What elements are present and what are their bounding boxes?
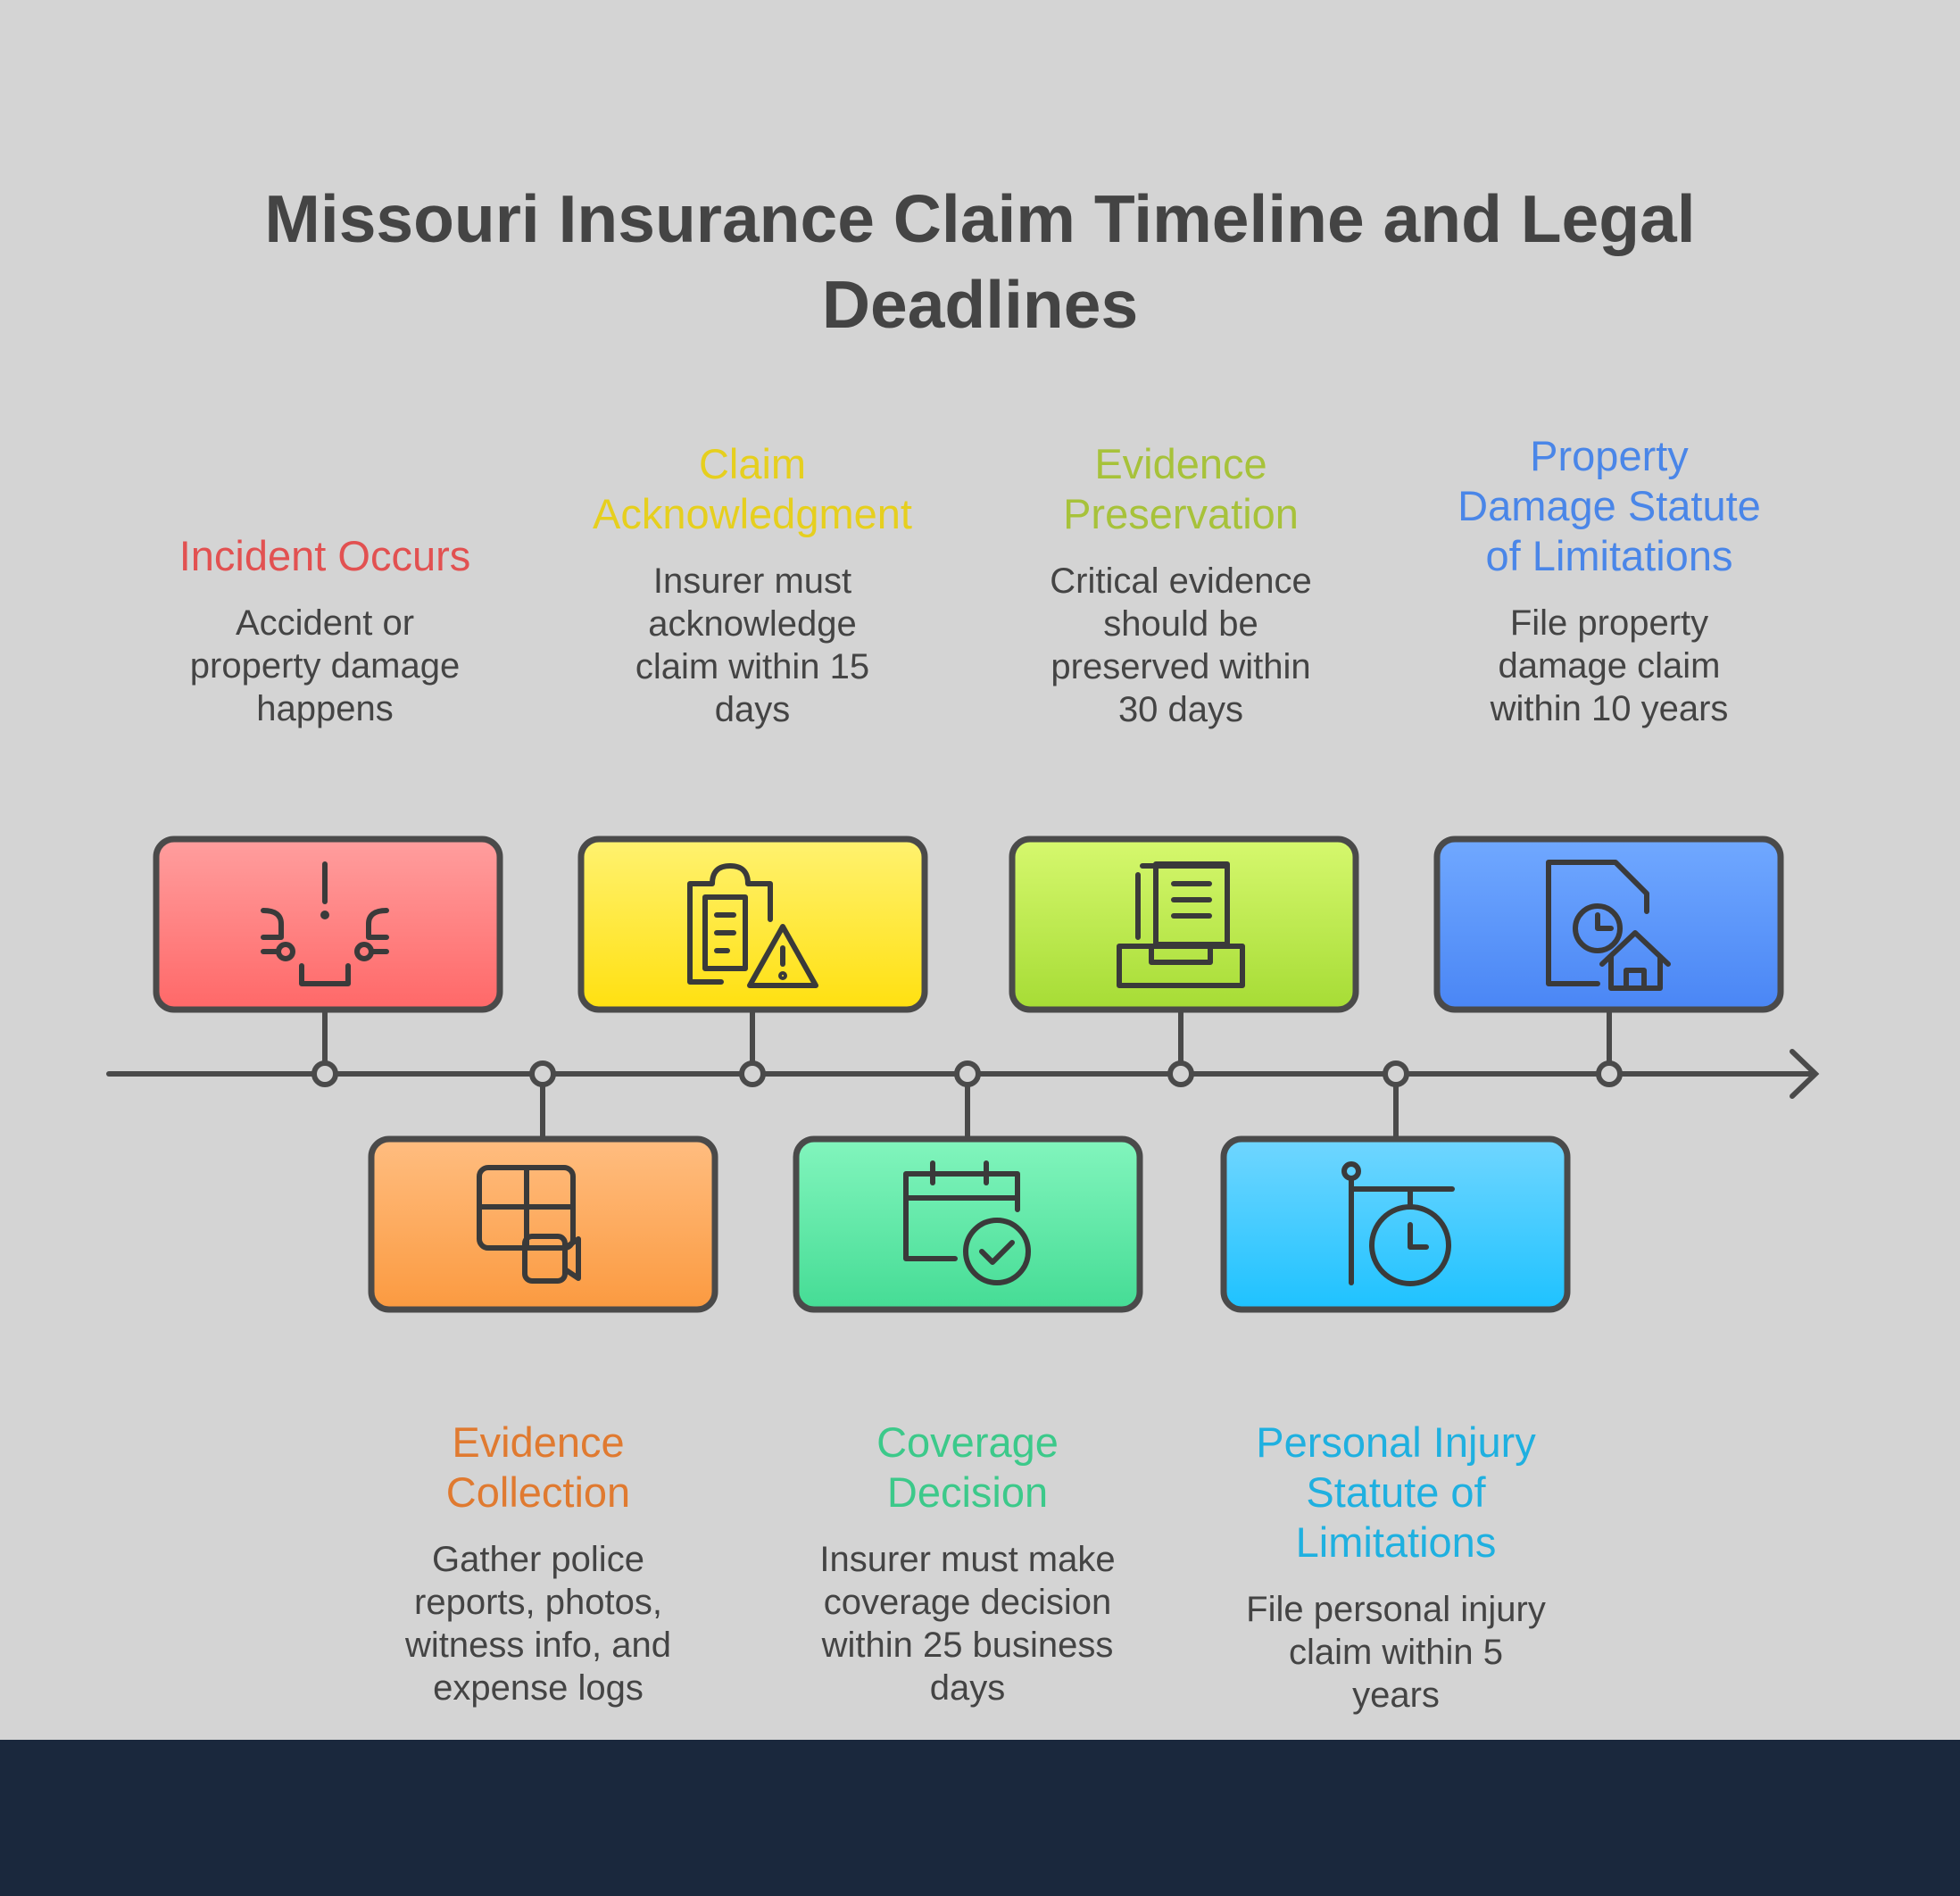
title: Deadlines: [822, 267, 1138, 342]
text: Evidence Collection: Collection: [446, 1468, 630, 1516]
text: Evidence Collection: Evidence: [452, 1418, 625, 1466]
text: Personal Injury Statute: Personal Injury: [1256, 1418, 1536, 1466]
icon: clipboard warning: [690, 866, 816, 985]
text: Coverage Decision: days: [930, 1668, 1005, 1708]
text: Claim Acknowledgment: acknowledge: [648, 604, 857, 644]
footer band: [0, 1740, 1960, 1896]
text: Claim Acknowledgment: days: [715, 690, 790, 729]
text: Evidence Collection: reports, photos,: [414, 1583, 662, 1622]
title: Missouri Insurance Claim Timeline and Legal: [264, 181, 1696, 256]
text: Claim Acknowledgment: Claim: [699, 440, 806, 487]
text: Property Damage Statute: Damage Statute: [1458, 482, 1761, 529]
icon: car crash: [263, 864, 386, 984]
text: Claim Acknowledgment: Insurer must: [653, 561, 851, 601]
text: Coverage Decision: within 25 business: [822, 1626, 1113, 1665]
text: Evidence Preservation: 30 days: [1118, 690, 1243, 729]
text: Incident Occurs: property damage: [190, 646, 460, 686]
text: Personal Injury Statute: Statute of: [1306, 1468, 1486, 1516]
title: [264, 181, 1696, 342]
text: Claim Acknowledgment: Acknowledgment: [593, 490, 912, 537]
text: Coverage Decision: Insurer must make: [819, 1540, 1116, 1579]
nodes: [314, 1063, 1620, 1085]
box: property damage: [1437, 839, 1781, 1010]
text: Property Damage Statute: [1458, 432, 1761, 728]
box: incident: [156, 839, 500, 1010]
text: Evidence Collection: [405, 1418, 671, 1708]
text: Personal Injury Statute: Limitations: [1296, 1518, 1496, 1566]
text: Coverage Decision: [819, 1418, 1116, 1708]
text: Property Damage Statute: damage claim: [1498, 646, 1721, 686]
text: Coverage Decision: Decision: [887, 1468, 1048, 1516]
text: Evidence Collection: expense logs: [433, 1668, 644, 1708]
text: Claim Acknowledgment: [593, 440, 912, 729]
text: Property Damage Statute: of Limitations: [1486, 532, 1732, 579]
text: Coverage Decision: coverage decision: [824, 1583, 1111, 1622]
icon: document tray: [1119, 864, 1242, 985]
box: claim ack: [581, 839, 925, 1010]
text: Personal Injury Statute: years: [1352, 1676, 1440, 1715]
text: Property Damage Statute: within 10 years: [1491, 689, 1728, 728]
text: Property Damage Statute: File property: [1510, 603, 1708, 643]
connectors: [325, 1010, 1609, 1138]
box: evidence collection: [371, 1139, 715, 1310]
box: evidence preservation: [1012, 839, 1356, 1010]
text: Evidence Preservation: Critical evidence: [1050, 561, 1312, 601]
text: Personal Injury Statute: [1246, 1418, 1546, 1715]
text: Claim Acknowledgment: claim within 15: [635, 647, 869, 686]
text: Personal Injury Statute: File personal injury: [1246, 1590, 1546, 1629]
text: Evidence Collection: witness info, and: [405, 1626, 671, 1665]
text: Incident Occurs: Incident Occurs: [179, 532, 470, 579]
icon: sign clock: [1344, 1164, 1452, 1284]
text: Evidence Preservation: should be: [1103, 604, 1258, 644]
timeline axis: [109, 1052, 1815, 1096]
text: Personal Injury Statute: claim within 5: [1289, 1633, 1503, 1672]
text: Incident Occurs: [179, 532, 470, 728]
text: Evidence Collection: Gather police: [432, 1540, 644, 1579]
text: Incident Occurs: Accident or: [236, 603, 414, 643]
text: Evidence Preservation: [1050, 440, 1312, 729]
text: Evidence Preservation: preserved within: [1051, 647, 1311, 686]
text: Incident Occurs: happens: [256, 689, 394, 728]
text: Evidence Preservation: Evidence: [1094, 440, 1267, 487]
icon: doc clock house: [1549, 862, 1668, 988]
text: Property Damage Statute: Property: [1530, 432, 1689, 479]
box: coverage decision: [796, 1139, 1140, 1310]
icon: calendar check: [906, 1163, 1028, 1283]
box: personal injury: [1224, 1139, 1567, 1310]
icon: photo video: [479, 1168, 578, 1281]
text: Coverage Decision: Coverage: [876, 1418, 1059, 1466]
text: Evidence Preservation: Preservation: [1063, 490, 1299, 537]
